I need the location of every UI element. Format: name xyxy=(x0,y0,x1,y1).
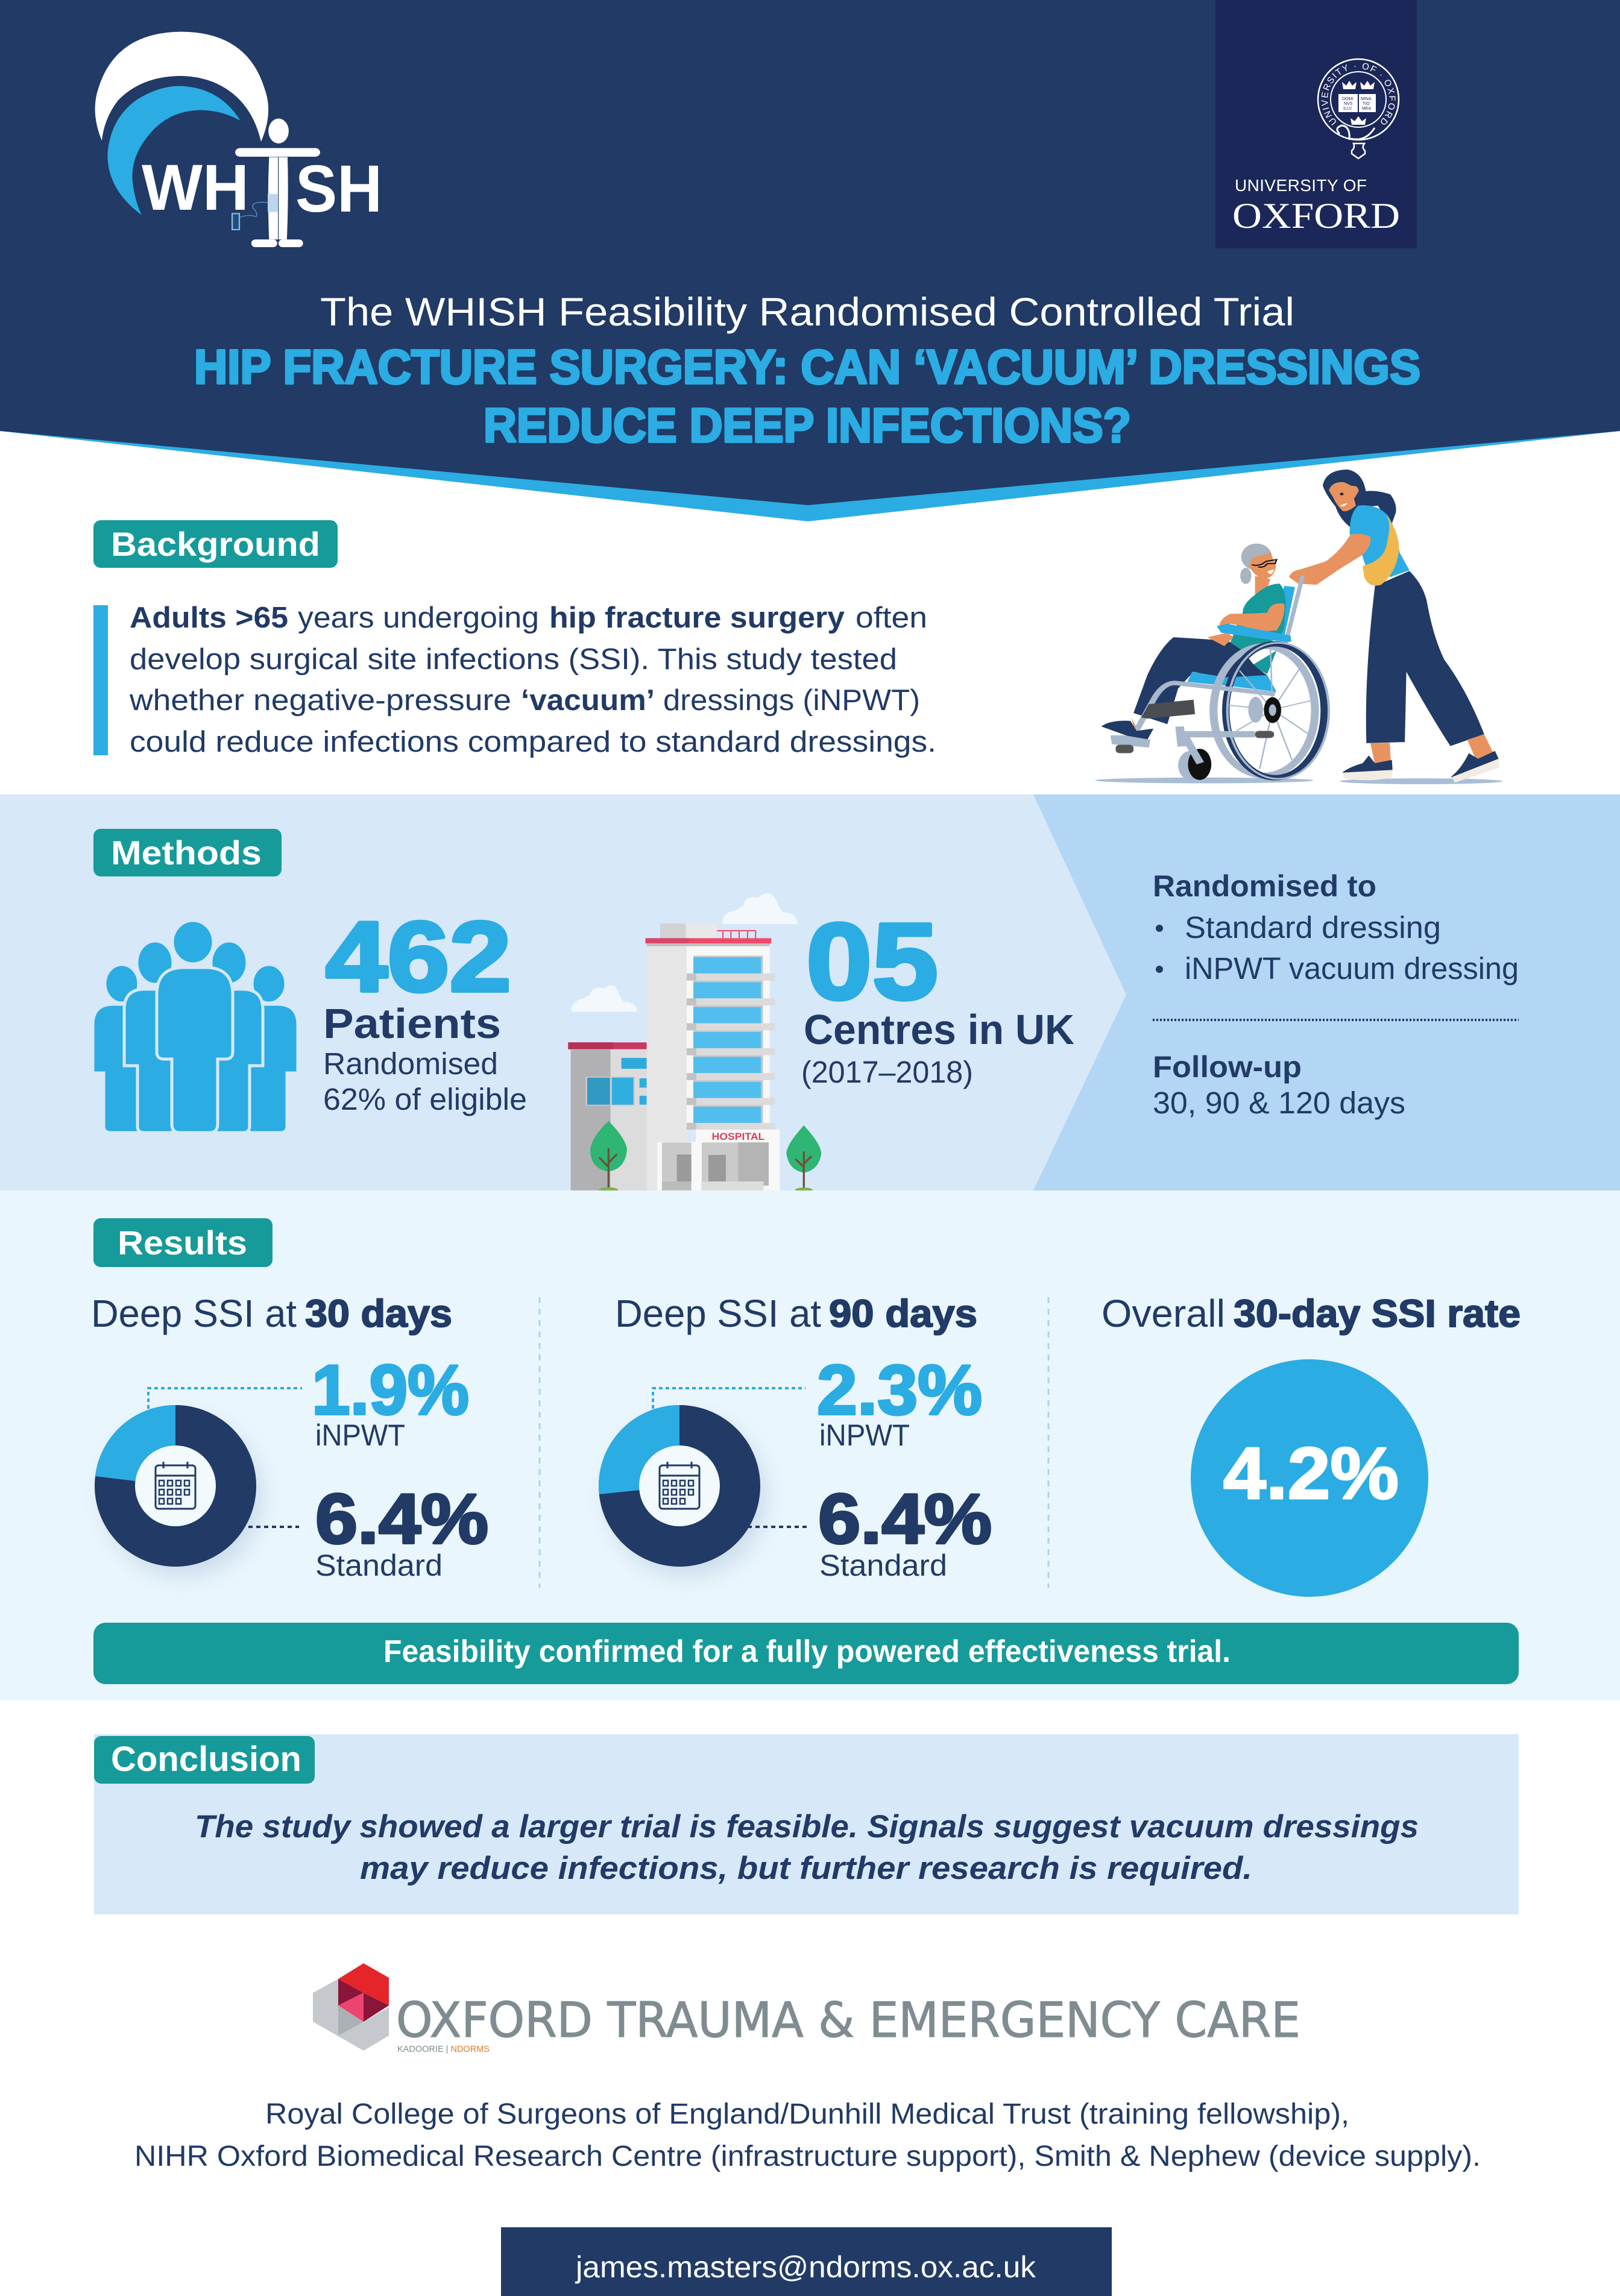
background text: hip fracture surgery xyxy=(549,602,845,634)
section: results band xyxy=(0,1190,1620,1700)
label: Conclusion: Conclusion xyxy=(111,1740,301,1779)
panel: randomisation and follow-up: Randomised to xyxy=(1153,869,1376,903)
stat: 462 patients: 62% of eligible xyxy=(323,1082,527,1116)
seal: ILLV xyxy=(1343,107,1352,111)
main heading: HIP FRACTURE SURGERY: CAN ‘VACUUM’ DRESSINGS xyxy=(194,340,1420,394)
connector standard xyxy=(248,1526,299,1528)
seal: MEA xyxy=(1362,107,1371,111)
value 6.4% standard: Standard xyxy=(315,1549,443,1582)
panel: randomisation and follow-up: iNPWT vacuum dressing xyxy=(1185,951,1519,986)
background text: often xyxy=(856,602,927,634)
panel: conclusion xyxy=(94,1734,1519,1914)
seal xyxy=(1317,58,1400,159)
logo: Oxford Trauma & Emergency Care xyxy=(313,1963,1300,2054)
main heading xyxy=(194,340,1420,452)
icon: calendar xyxy=(660,1462,699,1509)
heading: 30 days xyxy=(305,1292,452,1335)
value 6.4% standard: Standard xyxy=(819,1549,947,1582)
connector iNPWT xyxy=(148,1388,302,1409)
panel: randomisation and follow-up: 30, 90 & 120 days xyxy=(1153,1086,1405,1120)
backrest xyxy=(1270,586,1295,637)
donut chart xyxy=(599,1405,766,1576)
heading: 90 days xyxy=(829,1292,977,1335)
illustration: hospital: HOSPITAL xyxy=(712,1131,764,1142)
value 2.3% iNPWT: 2.3% xyxy=(817,1350,982,1429)
stat: 462 patients xyxy=(323,901,527,1116)
title: The WHISH Feasibility Randomised Controlled Trial xyxy=(320,289,1294,334)
heading: Deep SSI at xyxy=(91,1292,297,1335)
logo: University of Oxford: UNIVERSITY OF xyxy=(1235,176,1367,195)
woman xyxy=(1323,470,1396,528)
logo: WHISH: SH xyxy=(295,152,382,226)
illustration: carer pushing wheelchair xyxy=(1095,470,1502,784)
panel: randomisation and follow-up: Follow-up xyxy=(1153,1050,1302,1084)
wheel xyxy=(1214,643,1329,779)
label: Background xyxy=(93,520,338,568)
funding acknowledgement: Royal College of Surgeons of England/Dunhill Medical Trust (training fellowship), xyxy=(265,2098,1349,2130)
heading: Deep SSI at xyxy=(615,1292,821,1335)
seal: DOMI xyxy=(1342,97,1353,101)
dividers xyxy=(540,1297,1048,1588)
seal: TIO xyxy=(1363,102,1370,106)
seal: UNIVERSITY · OF · OXFORD xyxy=(1322,63,1395,125)
panel: randomisation and follow-up xyxy=(1033,794,1620,1190)
logo: WHISH xyxy=(95,32,382,247)
illustration: hospital xyxy=(568,893,821,1193)
contact email xyxy=(501,2227,1112,2296)
label: Results xyxy=(93,1218,273,1267)
heading xyxy=(91,1292,452,1335)
funding acknowledgement: NIHR Oxford Biomedical Research Centre (infrastructure support), Smith & Nephew (device supply). xyxy=(134,2140,1481,2172)
funding acknowledgement xyxy=(134,2098,1481,2172)
section: background xyxy=(93,520,936,758)
background text: Adults >65 xyxy=(130,602,288,634)
background text: ‘vacuum’ xyxy=(521,684,655,717)
heading: 30-day SSI rate xyxy=(1234,1292,1521,1335)
stat: 462 patients: Randomised xyxy=(323,1046,498,1081)
panel: overall 30-day SSI rate xyxy=(1102,1292,1521,1597)
heading xyxy=(615,1292,977,1335)
heading: Overall xyxy=(1102,1292,1225,1335)
accent bar xyxy=(93,605,108,755)
background text: develop surgical site infections (SSI). This study tested xyxy=(130,643,897,676)
heading xyxy=(1102,1292,1521,1335)
stat: 462 patients: 462 xyxy=(326,901,511,1012)
conclusion text: The study showed a larger trial is feasible. Signals suggest vacuum dressings xyxy=(195,1809,1419,1845)
stat: 05 centres: Centres in UK xyxy=(804,1006,1074,1053)
seal: NVS xyxy=(1344,102,1353,106)
value 1.9% iNPWT: iNPWT xyxy=(315,1418,405,1452)
panel: deep SSI at 30 days xyxy=(91,1292,488,1582)
circle value: 4.2% xyxy=(1223,1432,1399,1514)
background text: dressings (iNPWT) xyxy=(663,684,920,717)
contact email: james.masters@ndorms.ox.ac.uk xyxy=(575,2250,1036,2284)
panel: randomisation and follow-up: Standard dressing xyxy=(1185,910,1441,945)
logo: University of Oxford: OXFORD xyxy=(1232,196,1400,236)
callout: feasibility xyxy=(93,1623,1519,1684)
stat: 05 centres xyxy=(801,901,1074,1089)
frame xyxy=(1129,683,1275,744)
connector standard xyxy=(748,1526,807,1528)
stat: 05 centres: (2017–2018) xyxy=(801,1055,973,1089)
label: Background: Background xyxy=(111,525,320,563)
seated patient xyxy=(1241,544,1272,570)
logo: Oxford Trauma & Emergency Care: OXFORD TRAUMA & EMERGENCY CARE xyxy=(396,1992,1300,2048)
label: Methods xyxy=(93,829,282,876)
background text: years undergoing xyxy=(298,602,539,634)
value 6.4% standard: 6.4% xyxy=(315,1479,488,1558)
icon: calendar xyxy=(156,1462,195,1509)
logo: University of Oxford xyxy=(1215,0,1417,248)
seal: MINA xyxy=(1361,97,1372,101)
background text xyxy=(129,602,936,758)
connector iNPWT xyxy=(653,1388,805,1409)
section: methods band xyxy=(0,794,1620,1190)
icon: group of people xyxy=(93,920,298,1133)
donut chart xyxy=(95,1405,262,1576)
main heading: REDUCE DEEP INFECTIONS? xyxy=(484,398,1131,452)
logo: WHISH: WH xyxy=(142,151,249,224)
panel: deep SSI at 90 days xyxy=(599,1292,992,1582)
stat: 462 patients: Patients xyxy=(323,1000,501,1047)
background text: could reduce infections compared to standard dressings. xyxy=(130,726,936,758)
conclusion text xyxy=(195,1809,1419,1886)
value 6.4% standard: 6.4% xyxy=(818,1479,992,1558)
stat: 05 centres: 05 xyxy=(806,901,938,1022)
value 1.9% iNPWT: 1.9% xyxy=(312,1350,469,1429)
logo: Oxford Trauma & Emergency Care: KADOORIE | NDORMS xyxy=(397,2044,490,2054)
circle value xyxy=(1191,1359,1428,1597)
label: Methods: Methods xyxy=(111,834,262,872)
callout: feasibility: Feasibility confirmed for a fully powered effectiveness trial. xyxy=(383,1634,1231,1669)
conclusion text: may reduce infections, but further research is required. xyxy=(360,1851,1252,1886)
header banner xyxy=(0,0,1620,521)
background text: whether negative-pressure xyxy=(129,684,511,717)
value 2.3% iNPWT: iNPWT xyxy=(819,1418,910,1452)
label: Results: Results xyxy=(118,1224,247,1262)
